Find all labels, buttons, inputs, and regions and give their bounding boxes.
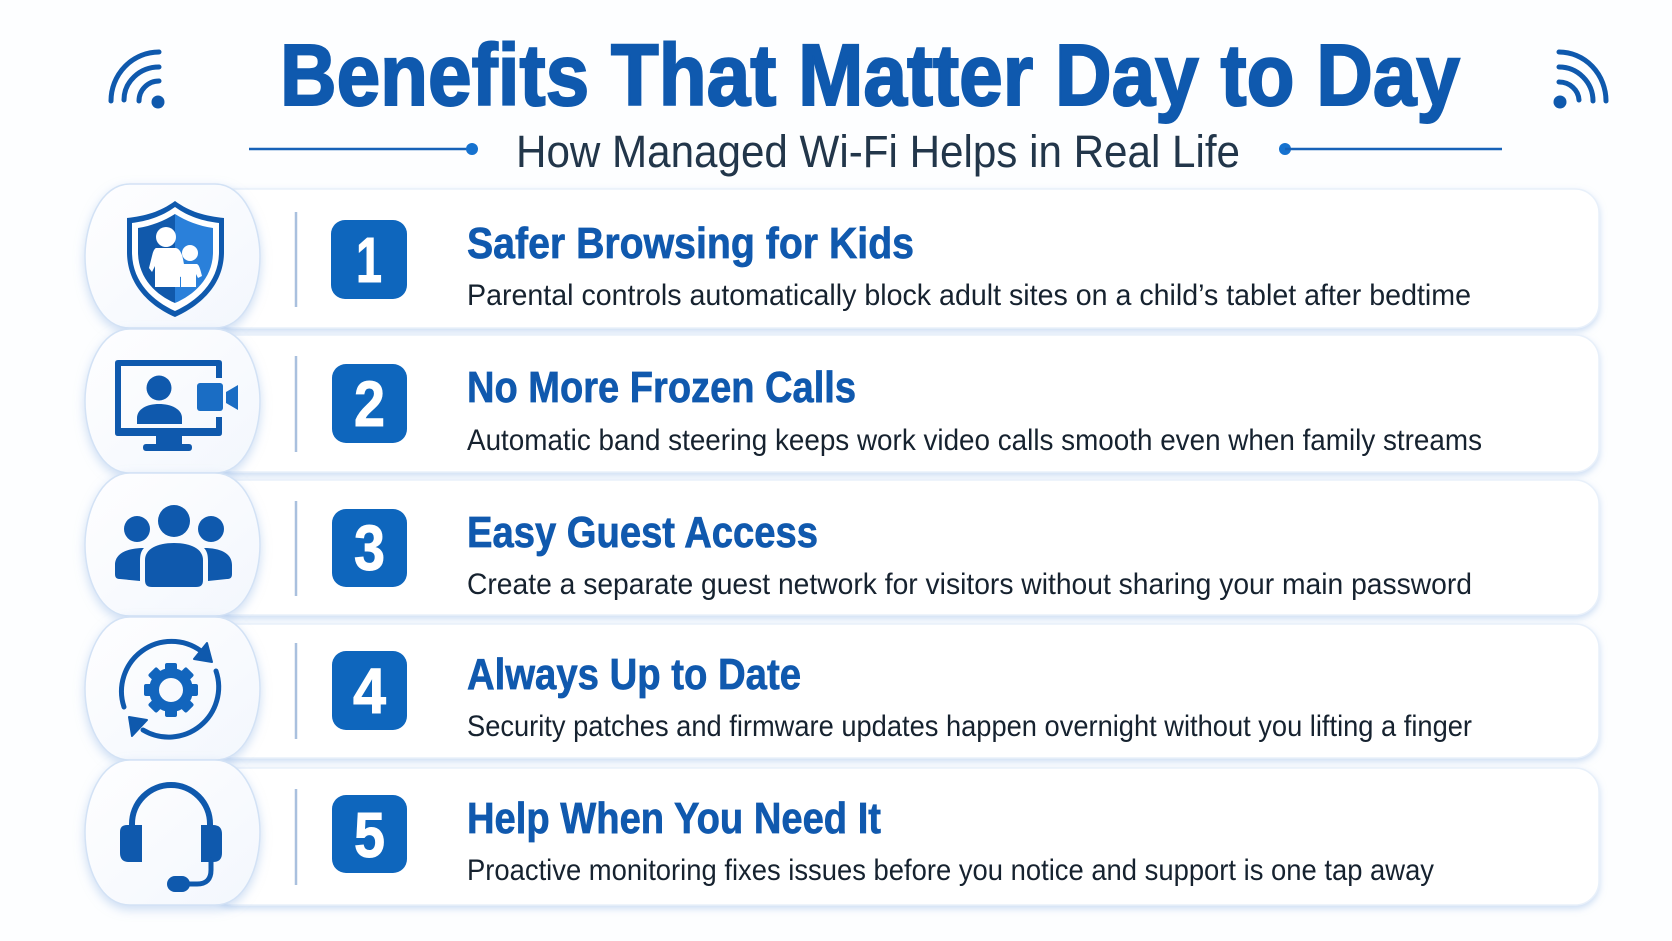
panel: benefit 4 [85,617,1599,760]
heading: Safer Browsing for Kids [467,219,914,268]
heading: Help When You Need It [467,794,881,843]
panel: benefit 3 [85,473,1599,616]
number 2: 2 [354,368,385,440]
description: Parental controls automatically block adult sites on a child’s tablet after bedtime [467,279,1471,312]
heading: Easy Guest Access [467,508,818,557]
heading: Always Up to Date [467,650,801,699]
description: Create a separate guest network for visitors without sharing your main password [467,568,1472,601]
number 4 [332,651,407,730]
number 1: 1 [356,224,382,296]
description: Security patches and firmware updates happen overnight without you lifting a finger [467,710,1472,743]
description: Automatic band steering keeps work video calls smooth even when family streams [467,424,1482,457]
left subtitle line with dot [249,143,478,155]
number 3 [332,509,407,587]
number 4: 4 [353,655,386,727]
icon badge: update gear [85,617,260,760]
number 5: 5 [354,799,385,871]
icon badge: shield [85,184,260,328]
number 2 [332,364,407,443]
number 3: 3 [354,512,385,584]
gear [144,663,198,717]
number 1 [331,220,407,299]
icon: wifi right [1554,52,1606,108]
right subtitle line with dot [1279,143,1502,155]
title: Benefits That Matter Day to Day [280,27,1460,124]
panel: benefit 5 [85,760,1599,905]
panel: benefit 2 [85,329,1599,473]
panel: benefit 1 [85,184,1599,328]
heading: No More Frozen Calls [467,363,856,412]
icon: wifi left [111,52,164,108]
description: Proactive monitoring fixes issues before you notice and support is one tap away [467,854,1434,887]
icon badge: guests [85,473,260,616]
number 5 [332,795,407,873]
subtitle: How Managed Wi-Fi Helps in Real Life [516,126,1240,177]
icon badge: video call [85,329,260,473]
icon badge: headset [85,760,260,905]
